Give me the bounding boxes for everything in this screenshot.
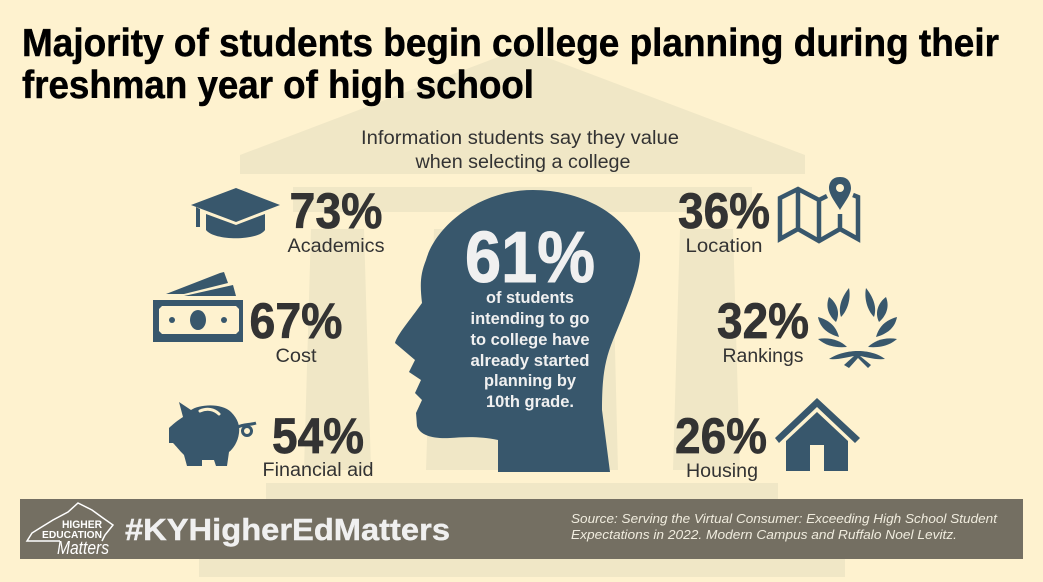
stat: location: 36% xyxy=(678,183,770,239)
icon: graduation cap xyxy=(191,188,280,238)
title: freshman year of high school xyxy=(22,64,534,107)
source note: Expectations in 2022. Modern Campus and Ruffalo Noel Levitz. xyxy=(571,528,957,542)
stat: financial aid xyxy=(262,408,374,481)
subtitle: when selecting a college xyxy=(414,152,630,173)
central statistic: 10th grade. xyxy=(486,392,574,411)
title xyxy=(22,22,999,107)
logo: Kentucky outline: EDUCATION xyxy=(42,529,102,541)
central statistic: planning by xyxy=(484,371,577,390)
stat: cost: Cost xyxy=(276,346,317,367)
source note xyxy=(571,512,998,542)
central statistic: already started xyxy=(470,351,590,370)
stat: financial aid: Financial aid xyxy=(262,460,374,481)
subtitle: Information students say they value xyxy=(361,128,679,149)
central statistic: 61% xyxy=(465,218,595,298)
stat: location: Location xyxy=(686,236,762,257)
stat: financial aid: 54% xyxy=(272,408,364,464)
central statistic: of students xyxy=(486,288,574,307)
footer banner xyxy=(20,499,1023,559)
source note: Source: Serving the Virtual Consumer: Exceeding High School Student xyxy=(571,512,998,526)
background building illustration xyxy=(199,48,845,577)
stat: cost: 67% xyxy=(250,293,342,349)
logo: Kentucky outline xyxy=(27,503,113,558)
stat: rankings: 32% xyxy=(717,293,809,349)
head silhouette xyxy=(395,190,640,472)
icon: house xyxy=(775,398,860,471)
stat: housing: Housing xyxy=(686,461,758,482)
stat: academics: 73% xyxy=(290,183,382,239)
subtitle xyxy=(361,128,679,173)
logo: Kentucky outline: HIGHER xyxy=(62,519,102,531)
stat: academics: Academics xyxy=(288,236,384,257)
hashtag: #KYHigherEdMatters xyxy=(125,512,450,547)
icon: piggy bank xyxy=(169,402,256,466)
logo: Kentucky outline: Matters xyxy=(57,538,109,558)
icon: laurel wreath xyxy=(818,288,897,368)
central statistic xyxy=(465,218,595,411)
title: Majority of students begin college planning during their xyxy=(22,22,999,65)
central statistic: to college have xyxy=(470,330,590,349)
central statistic: intending to go xyxy=(470,309,590,328)
icon: map with pin xyxy=(780,177,858,241)
stat: housing: 26% xyxy=(675,408,767,464)
icon: money xyxy=(153,272,243,342)
stat: rankings: Rankings xyxy=(722,346,804,367)
